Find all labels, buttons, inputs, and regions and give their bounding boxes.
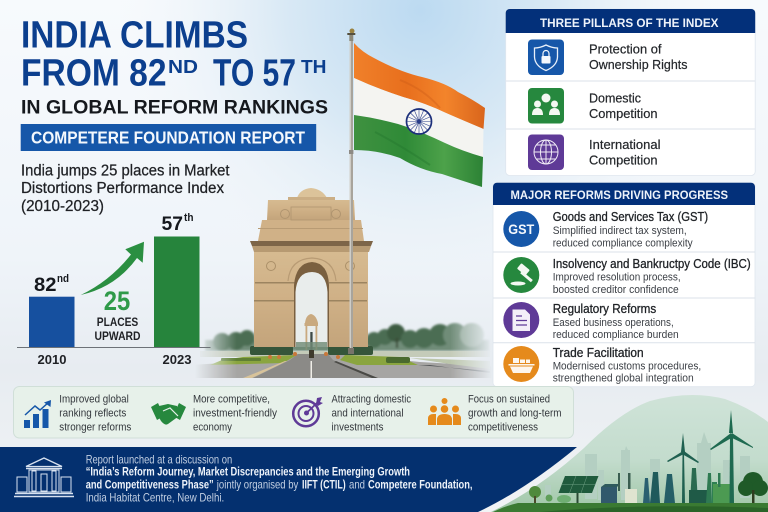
icon: people — [528, 88, 564, 124]
reform: trade: strengthened global integration — [553, 372, 694, 384]
pillar text: ownership — [589, 42, 688, 72]
callout: 25 places upward: UPWARD — [94, 329, 141, 343]
benefit text: investments — [332, 394, 411, 434]
benefit text: sustained growth: competitiveness — [468, 422, 538, 434]
panel: major reforms — [493, 183, 755, 387]
icon: gavel — [503, 257, 539, 293]
report banner: COMPETERE FOUNDATION REPORT — [31, 127, 305, 147]
flowers — [268, 352, 340, 359]
subtitle text: (2010-2023) — [21, 198, 104, 215]
icon: handshake — [151, 403, 186, 425]
reform: trade: Trade Facilitation — [553, 346, 644, 360]
heading — [493, 183, 755, 205]
pillar text: ownership: Protection of — [589, 42, 662, 56]
pillar text: domestic: Domestic — [589, 92, 641, 106]
hedges — [250, 346, 293, 355]
bar 2010: 82 — [34, 274, 57, 296]
pillar text: domestic — [589, 92, 658, 121]
lawns — [210, 355, 297, 365]
icon: growth chart — [24, 400, 51, 428]
bar 2010: nd — [57, 273, 69, 285]
footer text: IIFT (CTIL) — [302, 478, 346, 492]
pillar text: domestic: Competition — [589, 107, 658, 121]
icon: institution building — [14, 458, 74, 496]
reform: regulatory: Regulatory Reforms — [553, 302, 656, 316]
footer text: “India’s Reform Journey, Market Discrepancies and the Emerging Growth — [86, 464, 410, 478]
footer text — [86, 452, 472, 504]
title: TH — [301, 57, 326, 77]
reform: IBC — [553, 257, 751, 296]
callout: 25 places upward: PLACES — [97, 315, 138, 329]
heading: MAJOR REFORMS DRIVING PROGRESS — [510, 188, 728, 202]
title: IN GLOBAL REFORM RANKINGS — [21, 96, 328, 118]
benefit text: competitive — [193, 394, 277, 434]
pillar text: international: Competition — [589, 153, 658, 167]
solar panel — [558, 476, 598, 503]
footer text: jointly organised by — [216, 478, 298, 492]
reform: IBC: Insolvency and Bankructpy Code (IBC) — [553, 257, 751, 271]
pillar text: international — [589, 138, 660, 167]
reform: GST — [553, 210, 708, 250]
tree line — [205, 323, 490, 351]
bar 2010 — [29, 273, 74, 367]
benefit text: ranking — [59, 394, 132, 434]
title: FROM 82 — [21, 52, 166, 95]
heading — [506, 9, 755, 33]
benefit text: investments: investments — [332, 422, 384, 434]
icon: shield lock — [528, 40, 564, 75]
bar chart: rank 2010 vs 2023 — [17, 212, 210, 367]
reform: IBC: Improved resolution process, — [553, 272, 681, 284]
benefit text: competitive: economy — [193, 422, 232, 434]
arrow: upward — [81, 242, 144, 295]
footer text: and — [349, 478, 365, 492]
reform: IBC: boosted creditor confidence — [553, 284, 679, 296]
road lines — [310, 361, 312, 378]
Ashoka chakra — [406, 109, 432, 134]
canopy in arch — [304, 314, 318, 350]
bar 2023: 57 — [162, 213, 183, 235]
bar 2023: 2023 — [162, 353, 192, 367]
title: INDIA CLIMBS — [21, 14, 248, 57]
footer text: Report launched at a discussion on — [86, 452, 232, 466]
ground — [493, 503, 768, 512]
benefit text: competitive: More competitive, — [193, 394, 270, 406]
icon: GST: GST — [508, 222, 535, 237]
faded skyline — [545, 432, 750, 500]
icon: GST — [503, 211, 539, 247]
road — [190, 354, 500, 378]
wind turbines — [667, 410, 753, 503]
benefit text: sustained growth: Focus on sustained — [468, 394, 550, 406]
pillar text: international: International — [589, 138, 660, 152]
benefit text: competitive: investment-friendly — [193, 408, 277, 420]
reform: GST: reduced compliance complexity — [553, 238, 693, 250]
panel: three pillars — [506, 9, 755, 176]
icon: cargo ship — [503, 346, 539, 382]
heading: THREE PILLARS OF THE INDEX — [540, 16, 719, 30]
benefit text: investments: and international — [332, 408, 404, 420]
callout: 25 places upward — [94, 286, 141, 343]
benefit text: ranking: stronger reforms — [59, 422, 132, 434]
icon: document — [503, 302, 539, 338]
benefit text: sustained growth — [468, 394, 562, 434]
benefit text: ranking: Improved global — [59, 394, 129, 406]
reform: regulatory: reduced compliance burden — [553, 329, 679, 341]
subtitle text — [21, 163, 230, 215]
pillar text: ownership: Ownership Rights — [589, 58, 688, 72]
footer band — [0, 447, 577, 512]
factories — [601, 468, 730, 503]
subtitle text: Distortions Performance Index — [21, 180, 224, 197]
title: ND — [168, 57, 198, 77]
reform: trade: Modernised customs procedures, — [553, 360, 701, 372]
icon: team — [428, 398, 461, 425]
reform: GST: Simplified indirect tax system, — [553, 225, 687, 237]
report banner — [21, 124, 316, 151]
title: TO 57 — [213, 52, 296, 95]
photo: India Gate with lawns and road — [190, 188, 500, 378]
benefit text: investments: Attracting domestic — [332, 394, 411, 406]
icon: target — [293, 397, 323, 426]
bar 2023: th — [184, 212, 194, 224]
illustration: green city and wind turbines — [491, 395, 768, 512]
reform: trade — [553, 346, 701, 384]
Indian flag — [354, 43, 485, 187]
monument — [250, 188, 373, 358]
footer text: Competere Foundation, — [368, 478, 472, 492]
footer text: and Competitiveness Phase” — [86, 478, 214, 492]
footer text: India Habitat Centre, New Delhi. — [86, 490, 224, 504]
panel: benefits strip — [14, 386, 574, 438]
callout: 25 places upward: 25 — [104, 286, 130, 316]
reform: regulatory: Eased business operations, — [553, 317, 674, 329]
icon: globe — [528, 134, 564, 170]
bar 2023 — [154, 212, 200, 367]
benefit text: ranking: ranking reflects — [59, 408, 127, 420]
reform: GST: Goods and Services Tax (GST) — [553, 210, 708, 224]
flag pole — [347, 28, 355, 354]
bar 2010: 2010 — [38, 353, 67, 367]
trees — [529, 472, 768, 503]
subtitle text: India jumps 25 places in Market — [21, 163, 230, 180]
title — [21, 14, 328, 119]
benefit text: sustained growth: growth and long-term — [468, 408, 562, 420]
reform: regulatory — [553, 302, 679, 341]
